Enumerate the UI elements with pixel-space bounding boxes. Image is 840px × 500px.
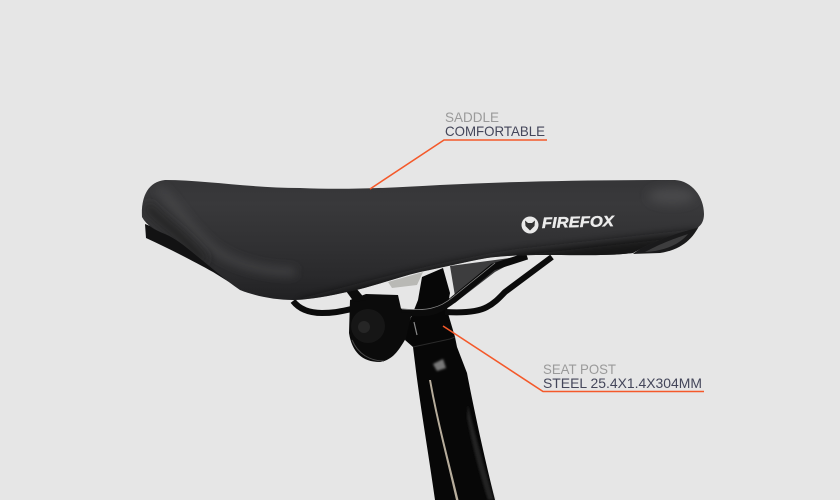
saddle label: SADDLE bbox=[445, 109, 499, 125]
seat post tube bbox=[405, 268, 495, 500]
upper rail bbox=[400, 256, 527, 313]
logo wordmark: FIREFOX bbox=[542, 213, 615, 232]
nose underside bbox=[633, 226, 699, 254]
post stripe bbox=[429, 380, 458, 500]
left rail bbox=[293, 301, 352, 313]
leader line: seat post bbox=[443, 326, 704, 392]
rear underside bbox=[145, 224, 245, 292]
under-saddle shadow panel bbox=[450, 256, 525, 302]
callout: saddle bbox=[370, 109, 547, 189]
clamp ring highlight bbox=[352, 340, 384, 361]
nose underside opening bbox=[645, 234, 688, 252]
saddle value: COMFORTABLE bbox=[445, 123, 545, 139]
head highlight bbox=[414, 322, 417, 335]
infographic canvas bbox=[142, 112, 704, 500]
post collar reflection bbox=[433, 359, 446, 371]
callout: seat post bbox=[443, 326, 704, 392]
under-saddle hardware bbox=[388, 272, 423, 288]
saddle nose highlight bbox=[648, 188, 696, 204]
rail highlight bbox=[402, 263, 495, 310]
clamp bolt bbox=[351, 309, 385, 343]
leader line: saddle bbox=[370, 140, 547, 189]
seat post label: SEAT POST bbox=[543, 361, 616, 377]
post right reflection bbox=[467, 405, 494, 500]
saddle left highlight bbox=[158, 188, 295, 272]
clamp body bbox=[349, 294, 412, 362]
saddle left shade bbox=[146, 205, 205, 262]
saddle body bbox=[142, 180, 704, 300]
seat post value: STEEL 25.4X1.4X304MM bbox=[543, 375, 702, 391]
logo icon: fox bbox=[522, 216, 538, 234]
saddle bbox=[142, 180, 704, 300]
brand logo bbox=[522, 213, 615, 234]
seat clamp and rails bbox=[293, 256, 552, 362]
post collar seam bbox=[413, 337, 455, 347]
rear support rail bbox=[445, 257, 552, 312]
saddle dark underside shading bbox=[300, 232, 700, 310]
